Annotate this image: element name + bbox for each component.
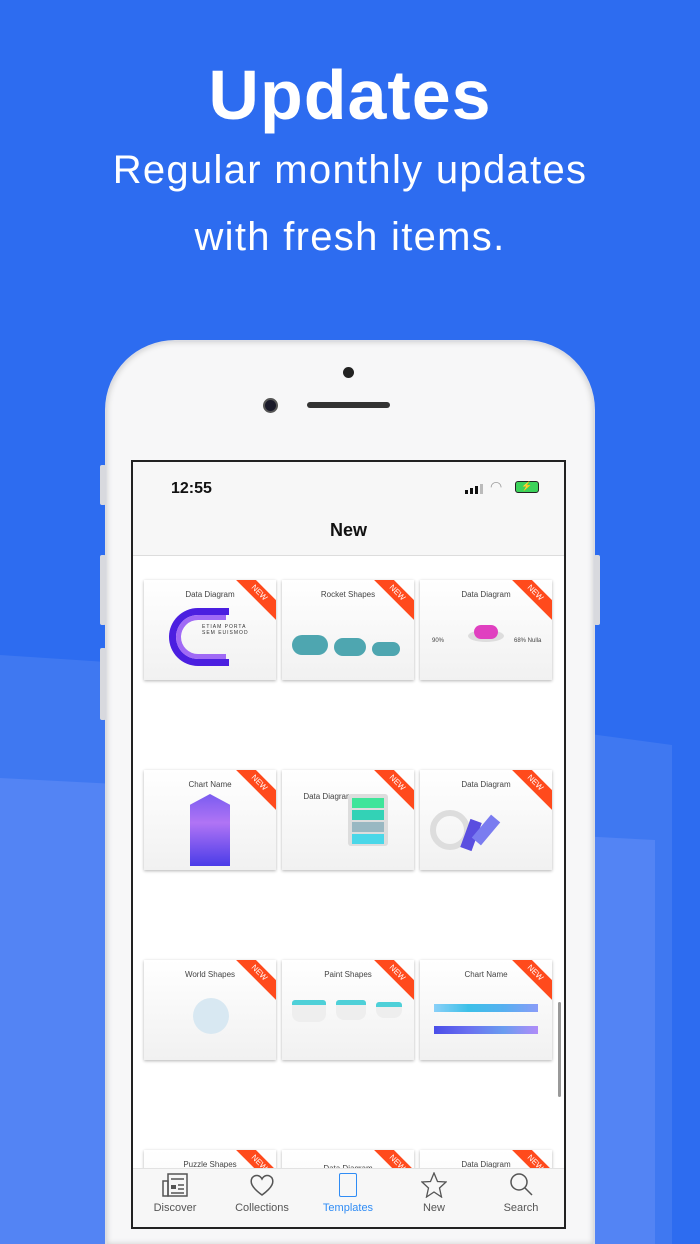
screen: Rocket Shapes [321, 590, 375, 599]
screen: NEW [526, 583, 545, 602]
row 1: Data Diagram [185, 590, 235, 599]
tab: collections [235, 1174, 289, 1214]
screen: Data Diagram [461, 1160, 511, 1169]
status/nav bar: 12:55 [171, 480, 212, 497]
tab: templates: Templates [323, 1202, 373, 1214]
tab: collections: Collections [235, 1202, 289, 1214]
screen: NEW [526, 773, 545, 792]
row 1: ETIAM PORTA [202, 624, 246, 630]
row 1: SEM EUISMOD [202, 630, 249, 636]
row 1: NEW [250, 583, 269, 602]
screen: Chart Name [464, 970, 508, 979]
screen: NEW [526, 1153, 545, 1172]
tab bar [133, 1168, 564, 1229]
screen: NEW [388, 1153, 407, 1172]
row 3: World Shapes [185, 970, 235, 979]
screen: Data Diagram [461, 590, 511, 599]
tab: templates [323, 1173, 373, 1214]
row 3: NEW [250, 963, 269, 982]
screen: Data Diagram [461, 780, 511, 789]
tab: discover: Discover [154, 1202, 196, 1214]
tab: search: Search [504, 1202, 538, 1214]
row 2: Chart Name [188, 780, 232, 789]
subtitle: with fresh items. [194, 215, 506, 259]
screen: NEW [388, 963, 407, 982]
status/nav bar: ⚡ [521, 481, 533, 491]
camera and speaker [343, 367, 354, 378]
title: Updates [208, 56, 492, 134]
screen: 68% Nulla [514, 638, 541, 644]
screen: NEW [388, 583, 407, 602]
tab: discover [154, 1173, 196, 1214]
status/nav bar: New [330, 520, 367, 540]
row 2: NEW [250, 773, 269, 792]
screen: Paint Shapes [324, 970, 372, 979]
screen: Data Diagram [303, 792, 353, 801]
tab: search [504, 1173, 538, 1214]
row 4: NEW [250, 1153, 269, 1172]
subtitle: Regular monthly updates [113, 148, 587, 192]
row 4 [144, 1150, 276, 1244]
status/nav bar: ◠ [490, 478, 502, 494]
tab: new: New [423, 1202, 445, 1214]
phone [105, 340, 595, 1244]
row 4: Puzzle Shapes [183, 1160, 237, 1169]
row 3 [144, 960, 276, 1060]
scroll indicator [558, 1002, 561, 1097]
screen: Data Diagram [323, 1164, 373, 1173]
row 2 [144, 770, 276, 870]
screen: NEW [388, 773, 407, 792]
screen: 90% [432, 638, 444, 644]
status/nav bar [133, 462, 564, 556]
tab: new [421, 1172, 447, 1214]
screen: NEW [526, 963, 545, 982]
subtitle [113, 148, 587, 259]
row 1 [144, 580, 276, 680]
screen [131, 460, 566, 1229]
